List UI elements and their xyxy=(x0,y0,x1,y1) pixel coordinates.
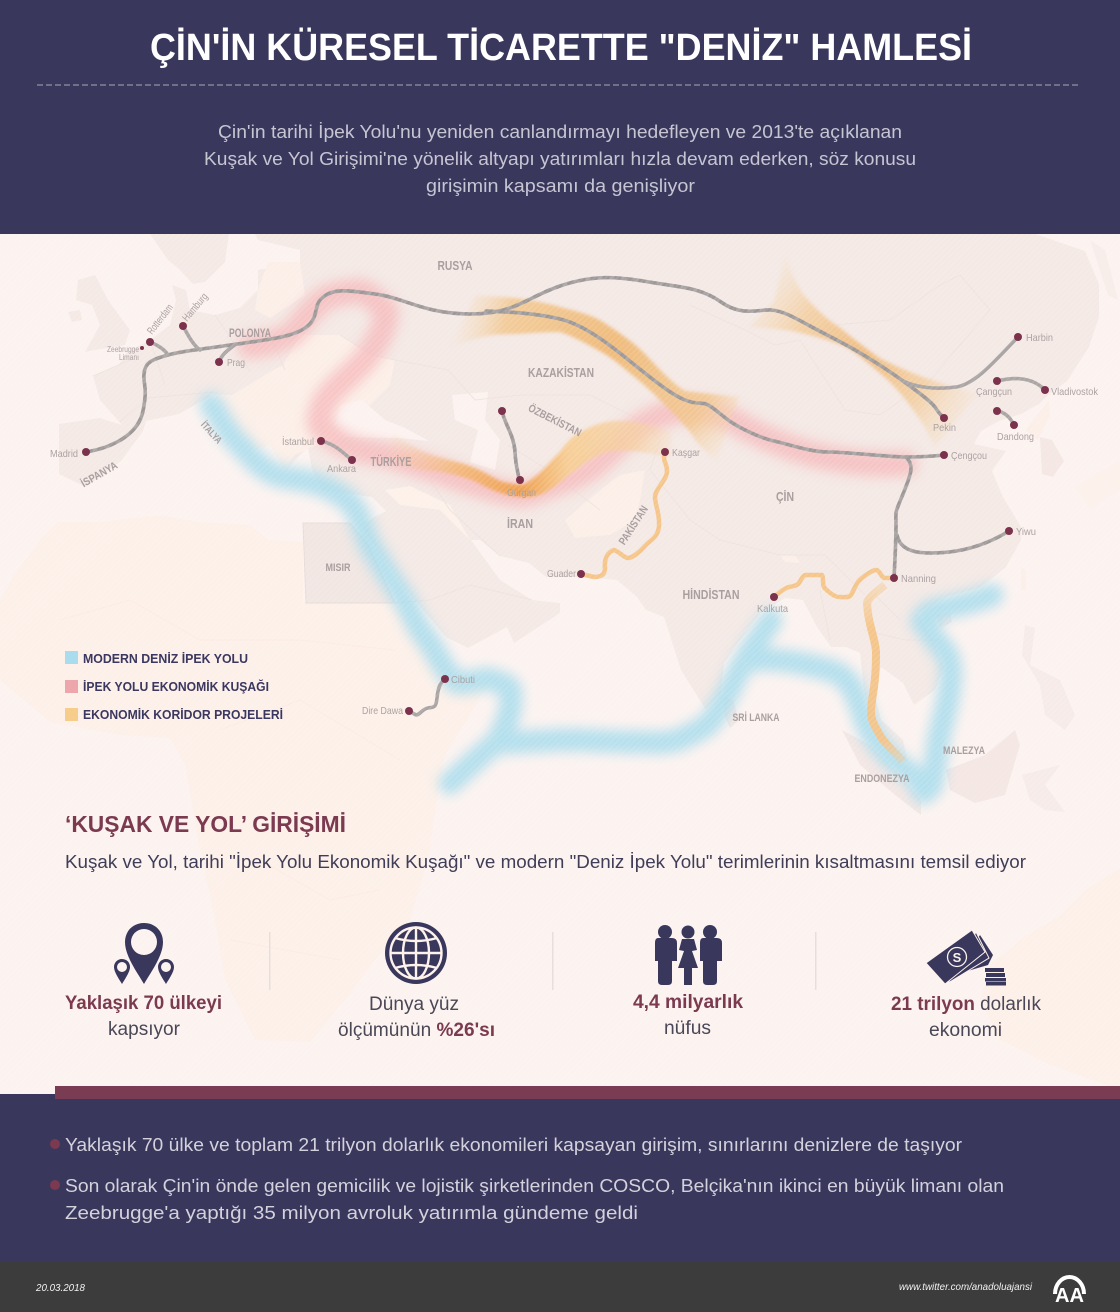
panel: map xyxy=(0,234,1120,1094)
country labels: İRAN xyxy=(507,516,533,531)
city labels: Guader xyxy=(547,568,576,580)
legend xyxy=(65,651,283,722)
stat: economy xyxy=(891,930,1041,1041)
city labels: Harbin xyxy=(1026,332,1053,344)
intro text: girişimin kapsamı da genişliyor xyxy=(426,175,695,196)
bullet note 2: Son olarak Çin'in önde gelen gemicilik ve lojistik şirketlerinden COSCO, Belçika'nın ikinci en büyük limanı olan xyxy=(65,1175,1004,1196)
city labels: Kalkuta xyxy=(757,603,788,615)
country labels: İTALYA xyxy=(198,418,225,446)
stat: population: nüfus xyxy=(664,1018,711,1039)
stat: surface area: Dünya yüz xyxy=(369,994,459,1015)
stat: economy: ekonomi xyxy=(929,1020,1002,1041)
city labels: Ankara xyxy=(327,463,356,475)
border lines xyxy=(93,275,990,640)
city labels: Limanı xyxy=(119,353,139,362)
city labels: Hamburg xyxy=(180,291,211,324)
bullet note 1: Yaklaşık 70 ülke ve toplam 21 trilyon dolarlık ekonomileri kapsayan girişim, sınırlarını denizlere de taşıyor xyxy=(65,1134,962,1155)
city labels: Dandong xyxy=(997,431,1034,443)
land: Africa xyxy=(0,515,490,1042)
legend: EKONOMİK KORİDOR PROJELERİ xyxy=(83,707,283,722)
panel: footer xyxy=(0,1262,1120,1312)
land: Scandinavia and Britain xyxy=(68,234,229,352)
land: Eurasia xyxy=(59,234,1099,763)
icon: globe xyxy=(385,922,447,984)
route: Kolkata to Nanning corridor xyxy=(774,570,894,597)
city labels: Nanning xyxy=(901,573,936,585)
city labels: Çangçun xyxy=(976,386,1012,398)
logo: AA: AA xyxy=(1055,1285,1084,1307)
hatch overlay xyxy=(0,234,1120,1094)
country labels: PAKİSTAN xyxy=(616,503,651,547)
twitter url: www.twitter.com/anadoluajansi xyxy=(899,1281,1033,1293)
city labels: İstanbul xyxy=(282,435,314,448)
panel: bottom notes xyxy=(0,1086,1120,1262)
date: 20.03.2018 xyxy=(35,1283,85,1294)
section heading: ‘KUŞAK VE YOL’ GİRİŞİMİ xyxy=(65,811,346,837)
panel: header xyxy=(0,0,1120,234)
route: Silk Road economic belt (pink) xyxy=(250,291,905,494)
stat: population xyxy=(633,925,743,1039)
legend: İPEK YOLU EKONOMİK KUŞAĞI xyxy=(83,679,269,694)
city labels: Dire Dawa xyxy=(362,705,403,717)
country labels: HİNDİSTAN xyxy=(682,587,740,602)
city labels: Madrid xyxy=(50,448,78,460)
land: South-East Asian islands xyxy=(724,240,1118,815)
icon: people xyxy=(655,925,722,985)
bullet note 2 xyxy=(50,1175,1004,1223)
route: Guader to Kashgar corridor xyxy=(581,452,667,577)
stat: surface area xyxy=(338,922,495,1041)
stat: population: 4,4 milyarlık xyxy=(633,992,743,1013)
country labels: SRİ LANKA xyxy=(732,711,780,724)
country labels: İSPANYA xyxy=(79,459,120,490)
country labels: ÇİN xyxy=(776,489,794,504)
city labels: Yiwu xyxy=(1016,526,1036,538)
country labels: MISIR xyxy=(326,562,351,574)
city labels: Gürgan xyxy=(507,487,536,499)
city labels: Rotterdam xyxy=(145,302,176,337)
country labels: ENDONEZYA xyxy=(854,773,910,785)
intro text xyxy=(204,121,916,196)
route: Nanning to Indonesia corridor xyxy=(867,585,903,762)
land: peach countries xyxy=(214,262,1120,590)
country labels: MALEZYA xyxy=(943,745,985,757)
country labels: KAZAKİSTAN xyxy=(528,365,594,380)
country labels: ÖZBEKİSTAN xyxy=(526,401,584,439)
icon: banknotes and coins xyxy=(926,930,1006,986)
stat: countries xyxy=(65,923,222,1040)
city labels: Çengçou xyxy=(951,450,987,462)
city dots xyxy=(82,322,1049,715)
city labels: Vladivostok xyxy=(1051,386,1099,398)
country labels xyxy=(79,258,985,785)
rail lines xyxy=(86,278,1045,715)
stat: surface area: ölçümünün %26'sı xyxy=(338,1020,495,1041)
country labels: POLONYA xyxy=(229,328,271,340)
stat: economy: 21 trilyon dolarlık xyxy=(891,994,1041,1015)
legend: MODERN DENİZ İPEK YOLU xyxy=(83,651,248,666)
title: ÇİN'İN KÜRESEL TİCARETTE "DENİZ" HAMLESİ xyxy=(150,26,972,69)
seas: Black Sea and Caspian xyxy=(335,392,500,540)
bullet note 2: Zeebrugge'a yaptığı 35 milyon avroluk yatırımla gündeme geldi xyxy=(65,1202,638,1223)
accent strip xyxy=(55,1086,1120,1099)
route: maritime silk road (blue) xyxy=(211,404,992,793)
icon: banknotes and coins: S xyxy=(953,950,962,965)
city labels xyxy=(50,291,1099,717)
stat separators xyxy=(269,932,816,990)
intro text: Çin'in tarihi İpek Yolu'nu yeniden canlandırmayı hedefleyen ve 2013'te açıklanan xyxy=(218,121,902,142)
city labels: Pekin xyxy=(933,422,956,434)
route: corridor band north-east China xyxy=(749,254,978,447)
city labels: Kaşgar xyxy=(672,447,700,459)
intro text: Kuşak ve Yol Girişimi'ne yönelik altyapı yatırımları hızla devam ederken, söz konusu xyxy=(204,148,916,169)
stat: countries: kapsıyor xyxy=(108,1019,181,1040)
country labels: RUSYA xyxy=(438,258,473,273)
route: corridor band central Asia xyxy=(450,296,739,461)
section description: Kuşak ve Yol, tarihi "İpek Yolu Ekonomik Kuşağı" ve modern "Deniz İpek Yolu" terimlerinin kısaltmasını temsil ediyor xyxy=(65,852,1026,872)
route: corridor Turkey to Kashgar xyxy=(385,421,672,497)
icon: map pins xyxy=(114,923,174,984)
city labels: Cibuti xyxy=(451,674,475,686)
land: Egypt xyxy=(303,523,395,603)
city labels: Zeebrugge xyxy=(107,345,139,354)
stat: countries: Yaklaşık 70 ülkeyi xyxy=(65,993,222,1014)
country labels: TÜRKİYE xyxy=(370,454,412,469)
land: Australia xyxy=(980,868,1120,1090)
city labels: Prag xyxy=(227,357,245,369)
